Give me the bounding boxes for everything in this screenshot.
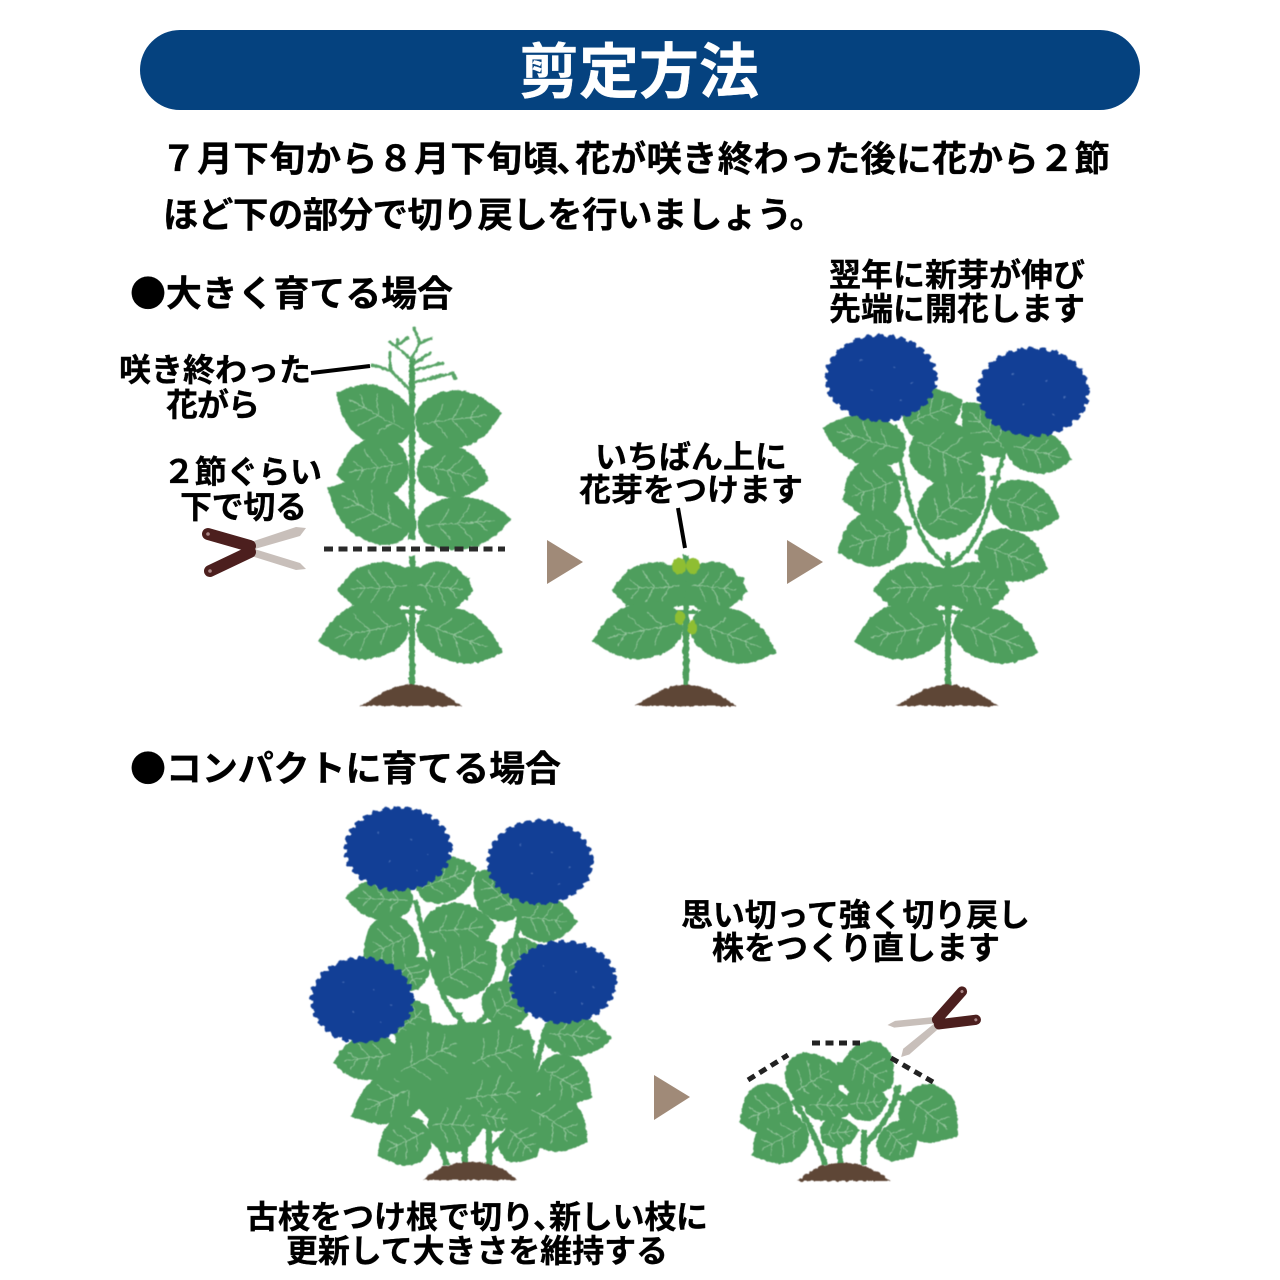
plant: after pruning with buds	[586, 555, 786, 706]
plant: next year flowering	[816, 336, 1087, 706]
arrow	[654, 1075, 690, 1120]
intro text: 、	[556, 139, 592, 179]
label: top flower bud: いちばん上に	[595, 439, 787, 475]
intro text: ７月下旬から８月下旬頃	[161, 139, 558, 179]
label: spent flower: 花がら	[166, 387, 260, 423]
leader line: bud	[678, 508, 685, 548]
title banner	[140, 30, 1140, 110]
label: renew branches: 新しい枝に	[549, 1199, 708, 1235]
arrow	[787, 540, 823, 584]
label: top flower bud	[579, 439, 803, 508]
label: renew branches: 、	[533, 1199, 565, 1235]
cut guide lines	[748, 1043, 933, 1082]
label: spent flower: 咲き終わった	[119, 352, 311, 388]
label: spent flower	[119, 352, 311, 423]
label: hard pruning	[681, 897, 1030, 966]
title: 剪定方法	[519, 39, 759, 106]
intro text: 花が咲き終わった後に花から２節	[575, 139, 1110, 179]
label: next year bloom: 先端に開花します	[829, 291, 1085, 327]
label: renew branches	[246, 1199, 708, 1269]
label: top flower bud: 花芽をつけます	[579, 472, 803, 508]
label: hard pruning: 思い切って強く切り戻し	[681, 897, 1030, 933]
label: next year bloom	[829, 257, 1085, 327]
leader line: spent flower	[311, 366, 370, 373]
label: next year bloom: 翌年に新芽が伸び	[829, 257, 1085, 293]
intro text	[161, 139, 1110, 235]
heading: compact growth: ●コンパクトに育てる場合	[130, 740, 561, 792]
intro text: ほど下の部分で切り戻しを行いましょう。	[163, 195, 825, 235]
label: cut two nodes below: ２節ぐらい	[163, 454, 322, 490]
plant: before pruning	[312, 328, 514, 706]
label: hard pruning: 株をつくり直します	[712, 930, 1000, 966]
cut line	[324, 546, 505, 552]
label: renew branches: 更新して大きさを維持する	[286, 1233, 668, 1269]
plant: compact full	[313, 809, 614, 1180]
heading: large growth: ●大きく育てる場合	[130, 265, 453, 317]
arrow	[547, 540, 583, 584]
scissors: angled	[886, 989, 980, 1058]
label: cut two nodes below	[163, 454, 322, 525]
label: cut two nodes below: 下で切る	[180, 489, 307, 525]
plant: hard pruned	[729, 1031, 975, 1181]
scissors: horizontal	[206, 527, 306, 573]
label: renew branches: 古枝をつけ根で切り	[246, 1199, 534, 1235]
